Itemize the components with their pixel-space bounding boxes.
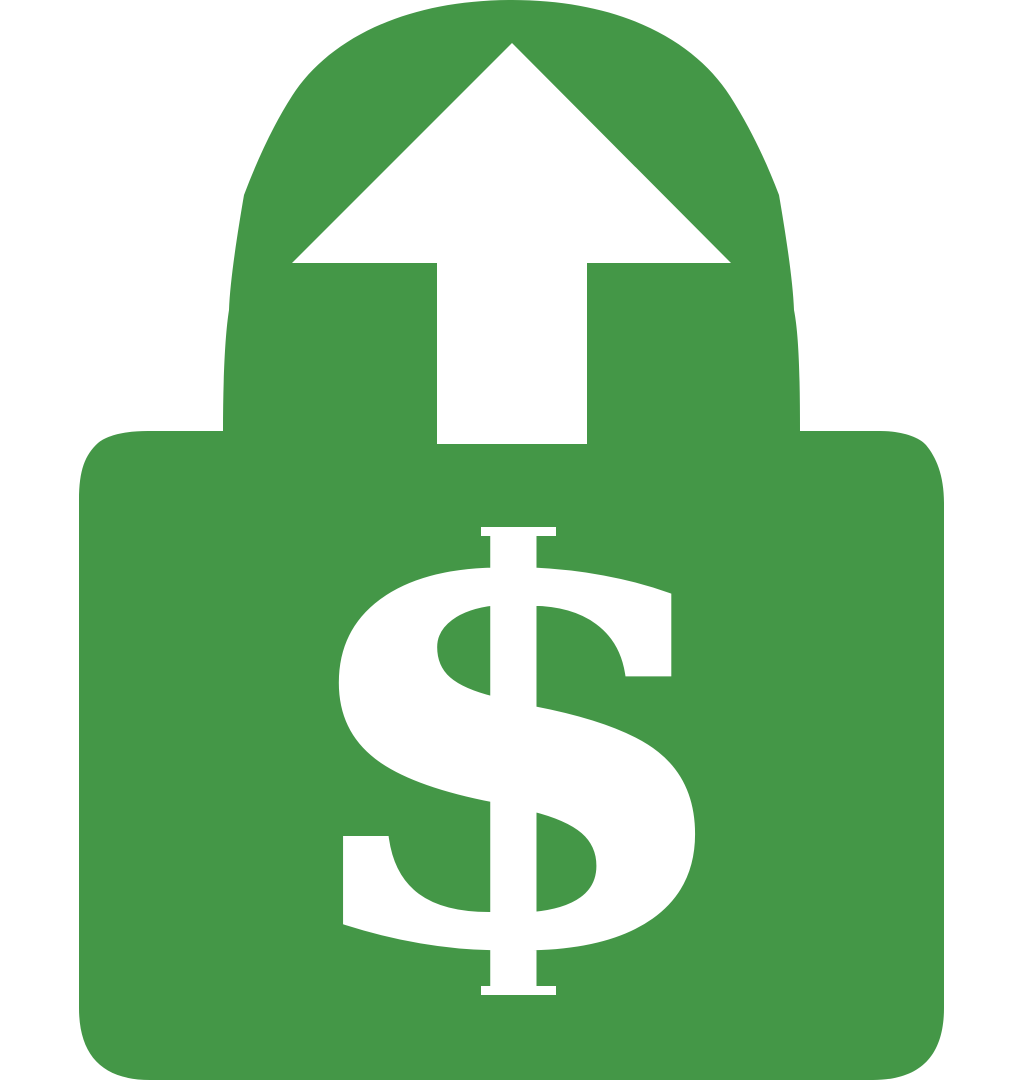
dollar sign: $ bbox=[283, 390, 747, 1077]
arrow: pointing up bbox=[292, 43, 731, 444]
dollar sign bbox=[338, 527, 696, 995]
